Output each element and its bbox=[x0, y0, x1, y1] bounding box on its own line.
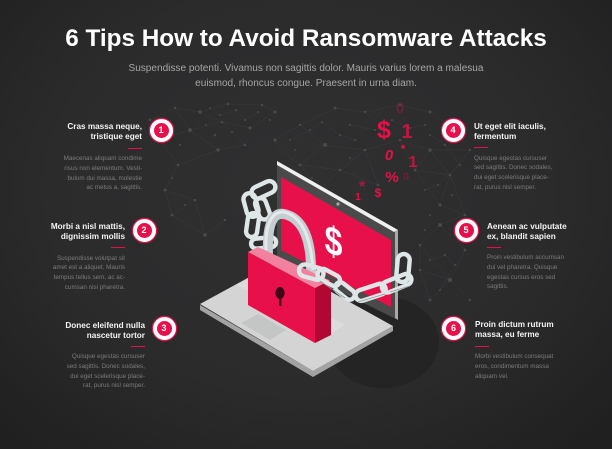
laptop base bbox=[200, 262, 393, 377]
heading 6: massa, eu ferme bbox=[475, 330, 539, 339]
body 2: amet est a aliquet. Mauris bbox=[53, 264, 125, 271]
heading 5: ex, blandit sapien bbox=[487, 232, 556, 240]
body 1: Maecenas aliquam condime bbox=[64, 155, 142, 162]
floating ransom symbols: $ bbox=[377, 116, 391, 144]
badge 5: 5 bbox=[463, 224, 468, 234]
heading 2: Morbi a nisl mattis, bbox=[51, 222, 125, 231]
badge 5 bbox=[454, 218, 478, 242]
body 3: dui eget scelerisque place- bbox=[70, 373, 145, 380]
body 2 bbox=[53, 254, 125, 291]
body 4: sed sagittis. Donec sodales, bbox=[474, 164, 552, 171]
floating ransom symbols: 0 bbox=[403, 171, 409, 183]
dollar sign: $ bbox=[325, 216, 343, 267]
padlock shackle bbox=[266, 212, 313, 276]
body 6: eros, condimentum massa bbox=[475, 363, 549, 370]
body 3: sed sagittis. Donec sodales, bbox=[67, 363, 145, 370]
heading 5: Aenean ac vulputate bbox=[487, 222, 567, 230]
heading 2 bbox=[51, 222, 125, 241]
accent line 2 bbox=[111, 247, 125, 248]
title: 6 Tips How to Avoid Ransomware Attacks bbox=[65, 25, 547, 52]
body 6: aliquam vel. bbox=[475, 373, 509, 380]
body 1: ac metus a, sagittis. bbox=[86, 184, 142, 191]
subtitle: Suspendisse potenti. Vivamus non sagittis dolor. Mauris varius lorem a malesua bbox=[128, 62, 483, 74]
body 4 bbox=[474, 154, 552, 191]
badge 3: 3 bbox=[161, 323, 166, 333]
badge 6 bbox=[442, 316, 465, 340]
body 4: rat, purus nisl semper. bbox=[474, 184, 536, 191]
body 6: Morbi vestibulum consequat bbox=[475, 353, 553, 360]
floating ransom symbols: 1 bbox=[409, 154, 418, 171]
padlock body bbox=[248, 247, 331, 343]
heading 6: Proin dictum rutrum bbox=[475, 320, 554, 329]
tip 1 bbox=[64, 118, 174, 191]
tip 6 bbox=[440, 316, 554, 380]
body 3 bbox=[66, 353, 145, 389]
floating ransom symbols: 1 bbox=[401, 121, 413, 143]
floating ransom symbols: 1 bbox=[355, 192, 361, 203]
body 5: sagittis. bbox=[487, 283, 508, 290]
heading 3: nascetur tortor bbox=[87, 330, 145, 340]
body 1: bulum dui massa, molestie bbox=[67, 175, 142, 182]
body 5: egestas cursus eros sed bbox=[487, 274, 555, 281]
keyhole bbox=[275, 287, 285, 306]
laptop shadow bbox=[327, 296, 439, 388]
badge 2 bbox=[132, 218, 156, 242]
tip 4 bbox=[440, 118, 552, 191]
accent line 5 bbox=[487, 247, 501, 248]
heading 3 bbox=[65, 320, 146, 340]
badge 3 bbox=[152, 317, 176, 340]
body 1: risus non elementum. Vesti- bbox=[64, 165, 142, 172]
accent line 1 bbox=[128, 148, 142, 149]
body 2: cumsan nisi pharetra. bbox=[65, 284, 125, 291]
laptop screen bbox=[277, 161, 398, 320]
heading 4 bbox=[474, 122, 546, 141]
body 5: dui vel pharetra. Quisque bbox=[487, 264, 557, 271]
body 5: Proin vestibulum accumsan bbox=[487, 254, 564, 261]
body 6 bbox=[475, 353, 554, 380]
floating ransom symbols: 0 bbox=[385, 147, 394, 164]
accent line 4 bbox=[474, 147, 488, 148]
badge 6: 6 bbox=[451, 322, 456, 332]
heading 6 bbox=[475, 320, 554, 339]
heading 5 bbox=[487, 222, 567, 240]
accent line 3 bbox=[131, 346, 145, 347]
chain left bbox=[242, 179, 277, 249]
heading 3: Donec eleifend nulla bbox=[65, 320, 145, 330]
body 5 bbox=[487, 254, 564, 290]
heading 1: tristique eget bbox=[91, 132, 142, 141]
badge 1 bbox=[150, 118, 172, 142]
body 1 bbox=[64, 155, 142, 191]
tip 2 bbox=[51, 218, 158, 291]
heading 4: Ut eget elit iaculis, bbox=[474, 122, 546, 131]
heading 1: Cras massa neque, bbox=[67, 122, 142, 131]
body 2: Suspendisse volutpat sit bbox=[57, 254, 125, 262]
tip 5 bbox=[454, 218, 567, 290]
subtitle: euismod, rhoncus congue. Praesent in urna diam. bbox=[195, 78, 417, 89]
badge 2: 2 bbox=[141, 224, 146, 234]
floating ransom symbols: $ bbox=[375, 186, 382, 200]
badge 4: 4 bbox=[450, 124, 456, 134]
badge 4 bbox=[442, 118, 464, 142]
subtitle bbox=[128, 62, 484, 89]
body 2: tempus tellus sem, ac ac- bbox=[54, 274, 125, 281]
body 4: Quisque egestas cursuser bbox=[474, 154, 547, 162]
body 3: Quisque egestas cursuser bbox=[72, 353, 145, 360]
chain right bbox=[298, 254, 413, 302]
floating ransom symbols: * bbox=[359, 177, 366, 196]
heading 4: fermentum bbox=[474, 132, 516, 141]
floating ransom symbols: * bbox=[401, 142, 406, 156]
floating ransom symbols bbox=[355, 100, 418, 203]
body 3: rat, purus nisl semper. bbox=[83, 382, 145, 389]
tip 3 bbox=[65, 316, 178, 389]
body 4: dui eget scelerisque place- bbox=[474, 174, 549, 181]
heading 1 bbox=[67, 122, 142, 141]
badge 1: 1 bbox=[158, 124, 164, 134]
accent line 6 bbox=[475, 346, 489, 347]
floating ransom symbols: % bbox=[385, 169, 399, 186]
heading 2: dignissim mollis bbox=[61, 232, 125, 241]
floating ransom symbols: 0 bbox=[396, 100, 404, 117]
